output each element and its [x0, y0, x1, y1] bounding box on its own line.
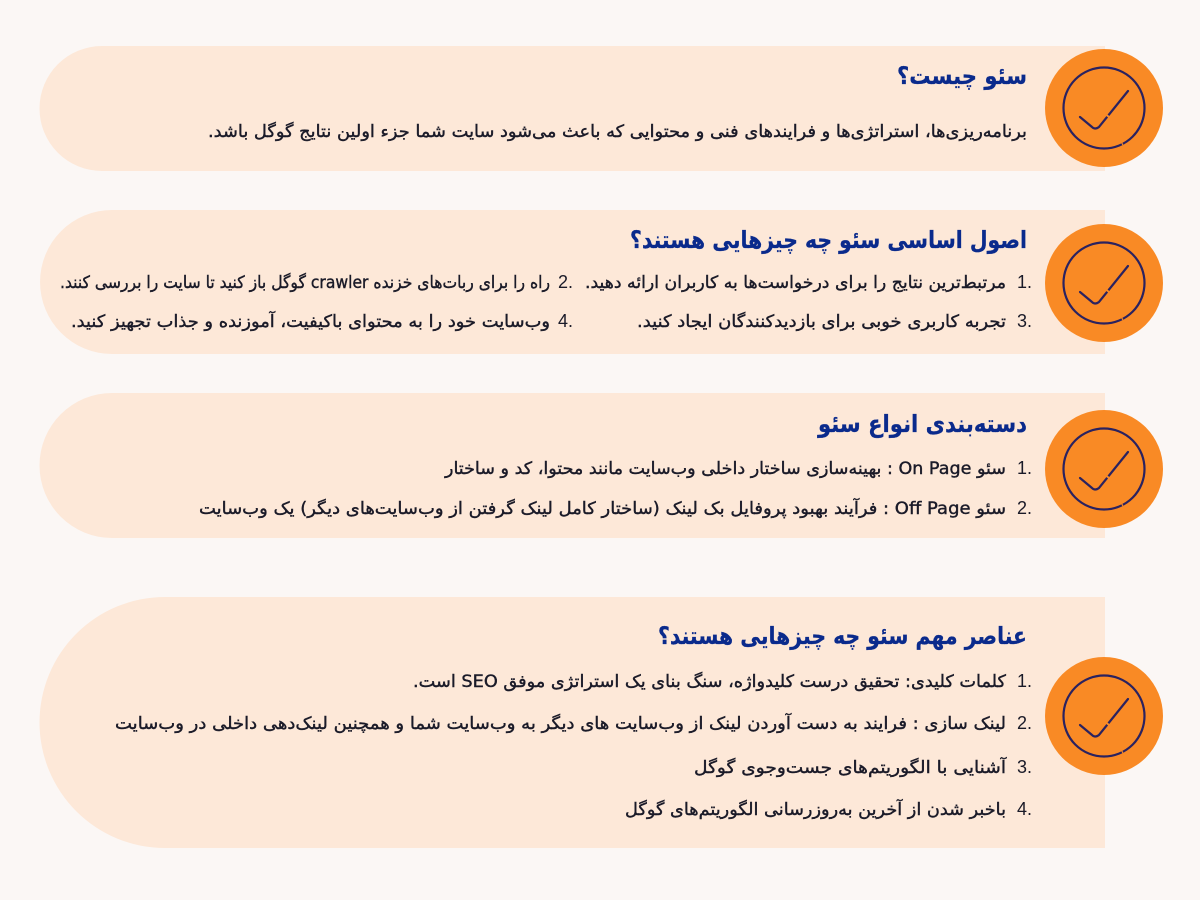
list item 1: کلمات کلیدی: تحقیق درست کلیدواژه، سنگ بنای یک استراتژی موفق SEO است.	[413, 671, 1007, 692]
heading: what is SEO: سئو چیست؟	[897, 62, 1027, 90]
list item 1: مرتبط‌ترین نتایج را برای درخواست‌ها به کاربران ارائه دهید.	[585, 273, 1006, 293]
panel: important SEO elements	[40, 597, 1163, 848]
heading: SEO types: دسته‌بندی انواع سئو	[817, 410, 1027, 438]
list item 1: 1.	[1017, 671, 1032, 691]
list item 2: 2.	[558, 272, 573, 292]
list item 3: آشنایی با الگوریتم‌های جست‌وجوی گوگل	[694, 756, 1007, 778]
icon: check badge	[1045, 49, 1163, 167]
list item 2: 2.	[1017, 713, 1032, 733]
list item 3: 3.	[1017, 311, 1032, 331]
text block: SEO definition: برنامه‌ریزی‌ها، استراتژی‌ها و فرایندهای فنی و محتوایی که باعث می‌شود سایت شما جزء اولین نتایج گوگل باشد.	[208, 121, 1027, 142]
list item 2: 2.	[1017, 498, 1032, 518]
list item 4: باخبر شدن از آخرین به‌روزرسانی الگوریتم‌های گوگل	[625, 798, 1006, 820]
icon: check badge	[1045, 410, 1163, 528]
panel: SEO principles	[40, 210, 1163, 354]
list item 4: 4.	[1017, 799, 1032, 819]
list item 1: 1.	[1017, 272, 1032, 292]
list item 4: وب‌سایت خود را به محتوای باکیفیت، آموزنده و جذاب تجهیز کنید.	[71, 310, 550, 332]
list item 3: تجربه کاربری خوبی برای بازدیدکنندگان ایجاد کنید.	[637, 311, 1006, 332]
list item 2: لینک سازی : فرایند به دست آوردن لینک از وب‌سایت های دیگر به وب‌سایت شما و همچنین لینک‌دهی داخلی در وب‌سایت	[115, 712, 1006, 734]
list item 2: سئو Off Page : فرآیند بهبود پروفایل بک لینک (ساختار کامل لینک گرفتن از وب‌سایت‌های دیگر) یک وب‌سایت	[199, 497, 1006, 519]
list item 3: 3.	[1017, 757, 1032, 777]
list item 1: سئو On Page : بهینه‌سازی ساختار داخلی وب‌سایت مانند محتوا، کد و ساختار	[444, 459, 1006, 479]
list item 2: راه را برای ربات‌های خزنده crawler گوگل باز کنید تا سایت را بررسی کنند.	[60, 272, 550, 293]
icon: check badge	[1045, 657, 1163, 775]
panel: SEO types	[40, 393, 1163, 538]
panel: what is SEO	[40, 46, 1163, 171]
icon: check badge	[1045, 224, 1163, 342]
heading: important SEO elements: عناصر مهم سئو چه چیزهایی هستند؟	[658, 622, 1027, 650]
list item 1: 1.	[1017, 458, 1032, 478]
list item 4: 4.	[558, 311, 573, 331]
heading: SEO principles: اصول اساسی سئو چه چیزهایی هستند؟	[630, 226, 1027, 254]
